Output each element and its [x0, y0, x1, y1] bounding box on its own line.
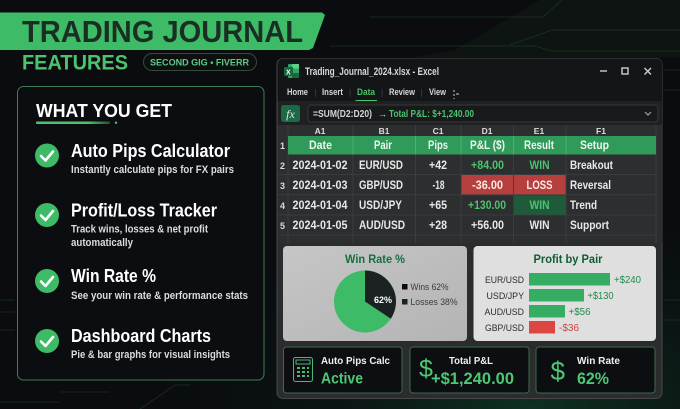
bar: aud/usd	[484, 305, 591, 318]
row 2: EUR/USD	[359, 160, 403, 172]
window title bar	[278, 58, 662, 102]
card: win rate: Win Rate	[577, 355, 620, 367]
row 5	[292, 220, 609, 232]
card: auto pips calc: Auto Pips Calc	[321, 355, 390, 367]
row 4: 2024-01-04	[292, 200, 348, 212]
feature: auto pips calculator	[35, 141, 234, 176]
row 5: 2024-01-05	[292, 220, 348, 232]
row 3: -36.00	[472, 180, 503, 192]
column letters: B1	[379, 126, 390, 136]
row 5: +56.00	[471, 220, 504, 232]
header row: Date	[309, 140, 332, 152]
feature: win rate	[35, 266, 248, 302]
feature: profit/loss tracker: Track wins, losses & net profit	[71, 224, 208, 236]
feature: dashboard charts	[35, 326, 230, 361]
row 4: USD/JPY	[359, 200, 402, 212]
bar: gbp/usd	[485, 321, 579, 334]
header row: Pips	[428, 140, 448, 152]
card: total p&l: Total P&L	[449, 355, 494, 367]
icon: check	[35, 329, 59, 353]
feature: dashboard charts: Dashboard Charts	[71, 326, 211, 346]
card: win rate	[536, 347, 655, 393]
ribbon tabs: Review	[389, 87, 415, 98]
icon: check	[35, 203, 59, 227]
column letters: C1	[433, 126, 444, 136]
card: auto pips calc	[284, 347, 402, 393]
row 2: +84.00	[471, 160, 504, 172]
icon: excel	[284, 64, 299, 78]
card: win rate: 62%	[577, 369, 609, 388]
formula bar: =SUM(D2:D20)	[313, 109, 372, 120]
header row: P&L ($)	[470, 140, 505, 152]
conditional highlight cells	[462, 175, 566, 215]
row 3: GBP/USD	[359, 180, 403, 192]
column letters	[315, 126, 606, 136]
bar: gbp/usd: GBP/USD	[485, 323, 524, 334]
row numbers	[280, 141, 285, 231]
feature: win rate: See your win rate & performance stats	[71, 290, 248, 302]
icon: fx	[281, 105, 300, 122]
window title bar: Trading_Journal_2024.xlsx - Excel	[305, 66, 439, 78]
icon: excel: X	[286, 70, 291, 76]
bar: eur/usd	[485, 273, 641, 286]
row 5: +28	[429, 220, 448, 232]
row 5: AUD/USD	[359, 220, 405, 232]
card: total p&l	[410, 347, 529, 393]
bar: aud/usd: AUD/USD	[484, 307, 524, 318]
feature: profit/loss tracker	[35, 200, 217, 249]
ribbon tabs: View	[429, 87, 446, 98]
card: total p&l: +$1,240.00	[431, 369, 514, 388]
grid lines	[278, 125, 656, 243]
window controls	[600, 68, 651, 74]
panel: excel window	[277, 58, 662, 398]
row numbers: 2	[280, 161, 285, 171]
row 3	[292, 180, 611, 192]
heading: what you get: WHAT YOU GET	[36, 100, 173, 121]
ribbon tabs: Data	[357, 87, 376, 98]
formula bar	[278, 101, 662, 125]
row 2: Breakout	[570, 160, 613, 172]
row 2: WIN	[530, 160, 550, 172]
row numbers: 4	[280, 201, 285, 211]
subtitle: features: FEATURES	[22, 50, 128, 74]
bar: usd/jpy: +$130	[588, 291, 614, 302]
heading underline	[36, 122, 117, 124]
header row: Result	[524, 140, 554, 152]
row 3: 2024-01-03	[292, 180, 348, 192]
pie chart: 62%	[374, 295, 392, 305]
badge: second gig fiverr: SECOND GIG • FIVERR	[150, 58, 249, 68]
pie legend: Wins 62%	[410, 282, 449, 293]
pie chart	[334, 270, 396, 332]
feature: win rate: Win Rate %	[71, 266, 156, 286]
row 4	[292, 200, 597, 212]
panel: profit by pair bar chart	[474, 246, 656, 341]
column letters: A1	[315, 126, 326, 136]
feature: profit/loss tracker: automatically	[71, 237, 134, 249]
data table	[278, 125, 662, 243]
panel: profit by pair bar chart: Profit by Pair	[534, 252, 603, 266]
badge: second gig fiverr	[144, 54, 256, 70]
card: auto pips calc: Active	[321, 370, 363, 388]
header row: Setup	[580, 140, 609, 152]
row numbers: 3	[280, 181, 285, 191]
header row: Pair	[374, 140, 392, 152]
icon: fx: fx	[286, 107, 295, 121]
ribbon tabs	[287, 87, 459, 102]
column letters: E1	[534, 126, 544, 136]
row 3: -18	[432, 180, 445, 192]
row 2	[292, 160, 613, 172]
icon: check	[35, 144, 59, 168]
row numbers: 5	[280, 221, 285, 231]
bar: usd/jpy	[486, 289, 614, 302]
bar: aud/usd: +$56	[568, 307, 591, 318]
bar: usd/jpy: USD/JPY	[486, 291, 525, 302]
feature: auto pips calculator: Instantly calculate pips for FX pairs	[71, 164, 234, 176]
header row	[288, 136, 656, 154]
row 2: +42	[429, 160, 447, 172]
bar: gbp/usd: -$36	[559, 323, 579, 334]
icon: check	[35, 269, 59, 293]
row 3: LOSS	[526, 180, 553, 192]
row 2: 2024-01-02	[292, 160, 348, 172]
row 4: +130.00	[468, 200, 506, 212]
bar: eur/usd: EUR/USD	[485, 275, 524, 286]
feature: profit/loss tracker: Profit/Loss Tracker	[71, 200, 217, 220]
ribbon tabs: Home	[287, 87, 308, 98]
panel: win rate pie chart	[283, 246, 467, 341]
row 4: WIN	[530, 200, 550, 212]
title banner: TRADING JOURNAL	[22, 15, 303, 49]
formula bar: →	[378, 109, 387, 119]
row 4: +65	[429, 200, 448, 212]
row 3: Reversal	[570, 180, 611, 192]
pie legend	[402, 282, 458, 308]
row 5: WIN	[530, 220, 550, 232]
column letters: F1	[596, 126, 606, 136]
formula bar: Total P&L: $+1,240.00	[389, 109, 474, 120]
ribbon tabs: Insert	[322, 87, 344, 98]
pie legend: Losses 38%	[410, 297, 458, 308]
icon: calculator	[294, 358, 312, 382]
row 4: Trend	[570, 200, 597, 212]
feature: dashboard charts: Pie & bar graphs for visual insights	[71, 349, 230, 361]
row numbers: 1	[280, 141, 285, 151]
row 5: Support	[570, 220, 609, 232]
icon: dollar: $	[419, 355, 433, 383]
bar: eur/usd: +$240	[614, 275, 641, 286]
panel: win rate pie chart: Win Rate %	[345, 252, 405, 266]
panel: what you get	[18, 86, 264, 380]
column letters: D1	[482, 126, 493, 136]
feature: auto pips calculator: Auto Pips Calculator	[71, 141, 230, 161]
icon: dollar: $	[550, 356, 566, 386]
